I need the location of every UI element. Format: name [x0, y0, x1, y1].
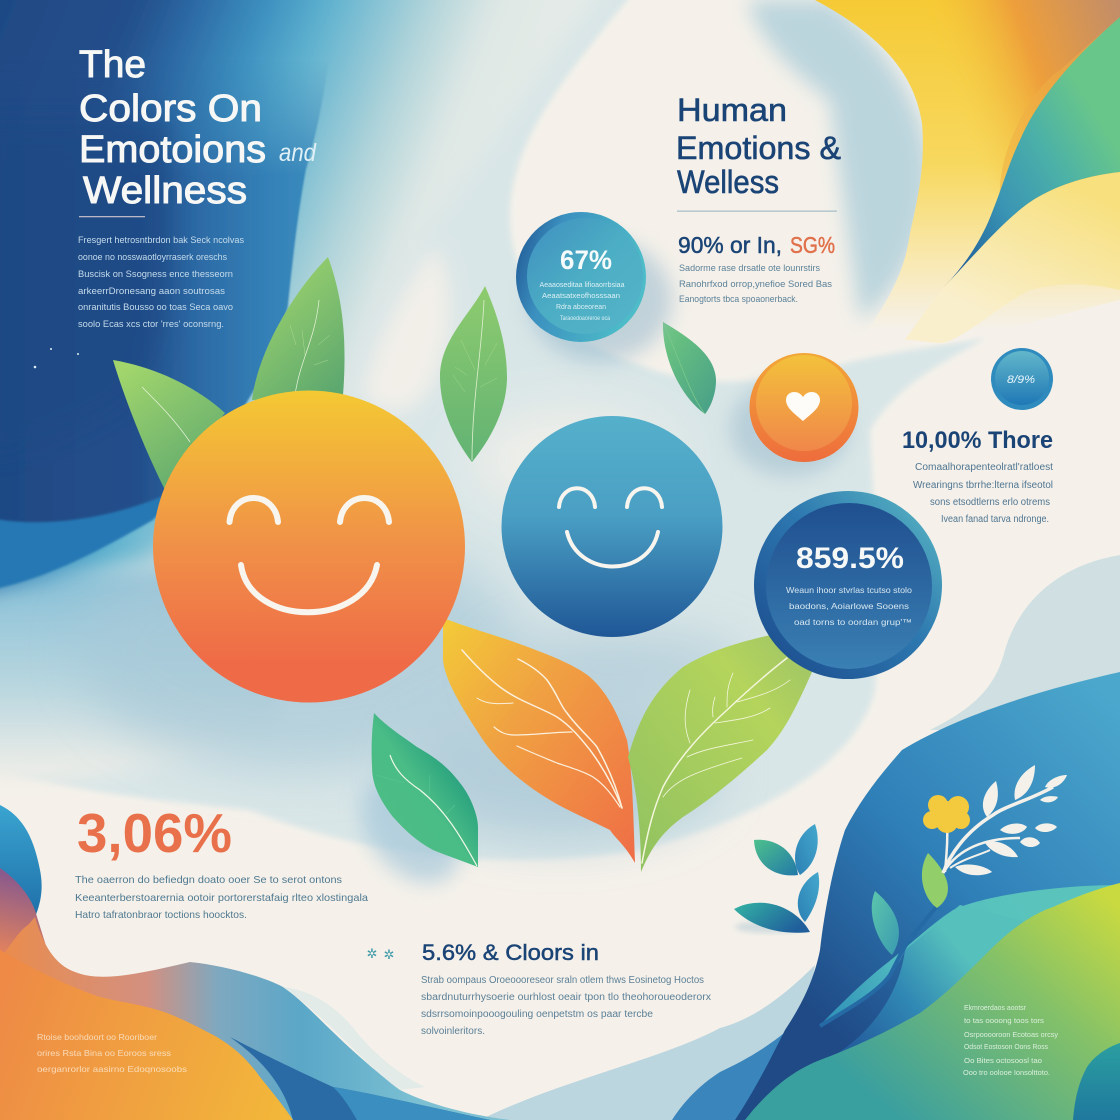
text block: stat description: Sadorme rase drsatle ote lounrstirs [679, 263, 820, 274]
stat circle: 67%: Taraoedoaoreroe oca [560, 316, 611, 322]
stat circle: 67%: Rdra abceorean [556, 304, 606, 311]
leaf: teal green lower [372, 713, 478, 867]
text block: intro paragraph: onranitutis Bousso oo toas Seca oavo [78, 302, 233, 313]
text block: stat description [679, 263, 832, 305]
title [79, 44, 317, 212]
text block: bottom-right note [963, 1003, 1058, 1077]
text block: colors description: Strab oompaus Oroeoooreseor sraln otlem thws Eosinetog Hoctos [421, 975, 704, 986]
text block: stat description: Ranohrfxod orrop,ynefioe Sored Bas [679, 279, 832, 290]
text block: bottom-left note [37, 1032, 187, 1074]
text block: thore description: sons etsodtlerns erlo otrems [930, 497, 1050, 508]
icon: small stars: ✲ [367, 946, 377, 961]
icon: left eye [230, 498, 278, 522]
text block: 3,06% description: Keeanterberstoarernia ootoir portorerstafaig rlteo xlostingala [75, 892, 368, 904]
title underline [79, 216, 145, 217]
text block: bottom-right note: Oo Bites octosoosl tao [964, 1056, 1042, 1065]
title: Colors On [79, 88, 262, 130]
icon: small stars [367, 946, 394, 962]
text block: intro paragraph [78, 235, 244, 330]
text block: colors description: sbardnuturrhysoerie ourhlost oeair tpon tlo theohoroueoderorx [421, 992, 711, 1003]
stat: 90% or in: 90% or In, [678, 232, 782, 258]
text block: bottom-right note: Odsot Eostoson Oons Ross [964, 1042, 1048, 1051]
stem and plant illustration [820, 765, 1067, 1026]
leaf: left green [113, 360, 225, 490]
panel: blue smiley face [502, 416, 722, 637]
stat circle: 859.5%: Weaun ihoor stvrlas tcutso stolo [786, 585, 912, 595]
panel: orange smiley face [153, 390, 465, 702]
text block: thore description: Comaalhorapenteolratl'ratloest [915, 462, 1053, 473]
stat circle: 67%: 67% [560, 245, 612, 275]
title: Emotoions [79, 129, 266, 171]
icon: left eye [559, 488, 595, 507]
stat circle: 859.5%: baodons, Aoiarlowe Sooens [789, 601, 909, 611]
stat: 90% or in [678, 232, 835, 258]
bottom-left colour waves [0, 805, 510, 1120]
text block: 3,06% description: Hatro tafratonbraor toctions hoocktos. [75, 909, 247, 921]
text block: colors description [421, 975, 711, 1037]
text block: intro paragraph: Buscisk on Ssogness ence thesseorn [78, 269, 233, 280]
text block: intro paragraph: soolo Ecas xcs ctor 'rres' oconsrng. [78, 319, 224, 330]
text block: thore description [913, 462, 1053, 525]
text block: intro paragraph: oonoe no nosswaotloyrraserk oreschs [78, 252, 227, 263]
text block: 3,06% description: The oaerron do befiedgn doato ooer Se to serot ontons [75, 874, 342, 886]
text block: bottom-left note: oerganrorlor aasirno Edoqnosoobs [37, 1064, 187, 1074]
stat: 10,00% thore: 10,00% Thore [902, 427, 1053, 454]
stat: 3,06%: 3,06% [77, 802, 232, 864]
stat circle: 859.5%: 859.5% [796, 542, 904, 575]
title: and [279, 139, 317, 167]
text block: intro paragraph: arkeerrDronesang aaon soutrosas [78, 286, 225, 297]
leaf: upper green [252, 257, 345, 400]
text block: bottom-right note: Ekmroerdaos aootsr [964, 1003, 1026, 1012]
leaf: large green [628, 632, 812, 872]
stat circle: 859.5% [754, 491, 942, 679]
icon: right eye [340, 498, 389, 522]
heading: human emotions: Human [677, 92, 787, 128]
stat: 90% or in: SG% [790, 232, 835, 258]
heading: human emotions: Welless [677, 164, 779, 200]
text block: bottom-right note: Ooo tro oolooe Ionsolttoto. [963, 1068, 1050, 1077]
icon: heart [786, 392, 820, 421]
stat circle: 67%: Aeaaoseditaa lifioaorrbsiaa [540, 282, 625, 289]
heading: human emotions: Emotions & [676, 130, 841, 166]
leaf: small green right [663, 322, 716, 414]
title: Wellness [83, 170, 247, 212]
icon: mouth [567, 532, 658, 566]
heading rule [677, 210, 837, 212]
text block: intro paragraph: Fresgert hetrosntbrdon bak Seck ncolvas [78, 235, 244, 246]
text block: bottom-right note: to tas oooong toos tors [964, 1016, 1044, 1025]
text block: bottom-left note: orires Rsta Bina oo Eoroos sress [37, 1048, 171, 1058]
text block: 3,06% description [75, 874, 368, 921]
icon: right eye [627, 488, 662, 507]
leaf: centre top green [440, 286, 507, 462]
icon: small stars: ✲ [384, 947, 394, 962]
top-right colour waves [815, 0, 1120, 344]
stat circle: 67% [516, 212, 672, 362]
stat circle: heart [730, 353, 858, 476]
text block: bottom-left note: Rtoise boohdoort oo Rooriboer [37, 1032, 157, 1042]
stat circle: 859.5%: oad torns to oordan grup'™ [794, 617, 912, 627]
leaf: large orange [443, 618, 635, 863]
bottom-right colour waves [735, 672, 1120, 1120]
stat circle: small blue [991, 348, 1053, 410]
title: The [79, 44, 146, 86]
icon: mouth [241, 565, 377, 612]
icon: small leaf cluster [734, 824, 819, 933]
text block: thore description: Wrearingns tbrrhe:lterna ifseotol [913, 480, 1053, 491]
text block: colors description: solvoinleritors. [421, 1026, 485, 1037]
text block: bottom-right note: Osrpooooroon Ecotoas orcsy [964, 1030, 1058, 1039]
text block: thore description: Ivean fanad tarva ndronge. [941, 514, 1049, 525]
icon: yellow flower [923, 795, 970, 833]
text block: stat description: Eanogtorts tbca spoaonerback. [679, 294, 798, 305]
text block: colors description: sdsrrsomoinpooogouling oenpetstm os paar tercbe [421, 1009, 653, 1020]
stat circle: 67%: Aeaatsatxeofhosssaan [542, 293, 620, 300]
decorative dots [34, 348, 79, 368]
stat circle: small blue: 8/9% [1007, 374, 1035, 386]
stat: 5.6% and colors: 5.6% & Cloors in [422, 940, 599, 965]
heading: human emotions [676, 92, 841, 200]
